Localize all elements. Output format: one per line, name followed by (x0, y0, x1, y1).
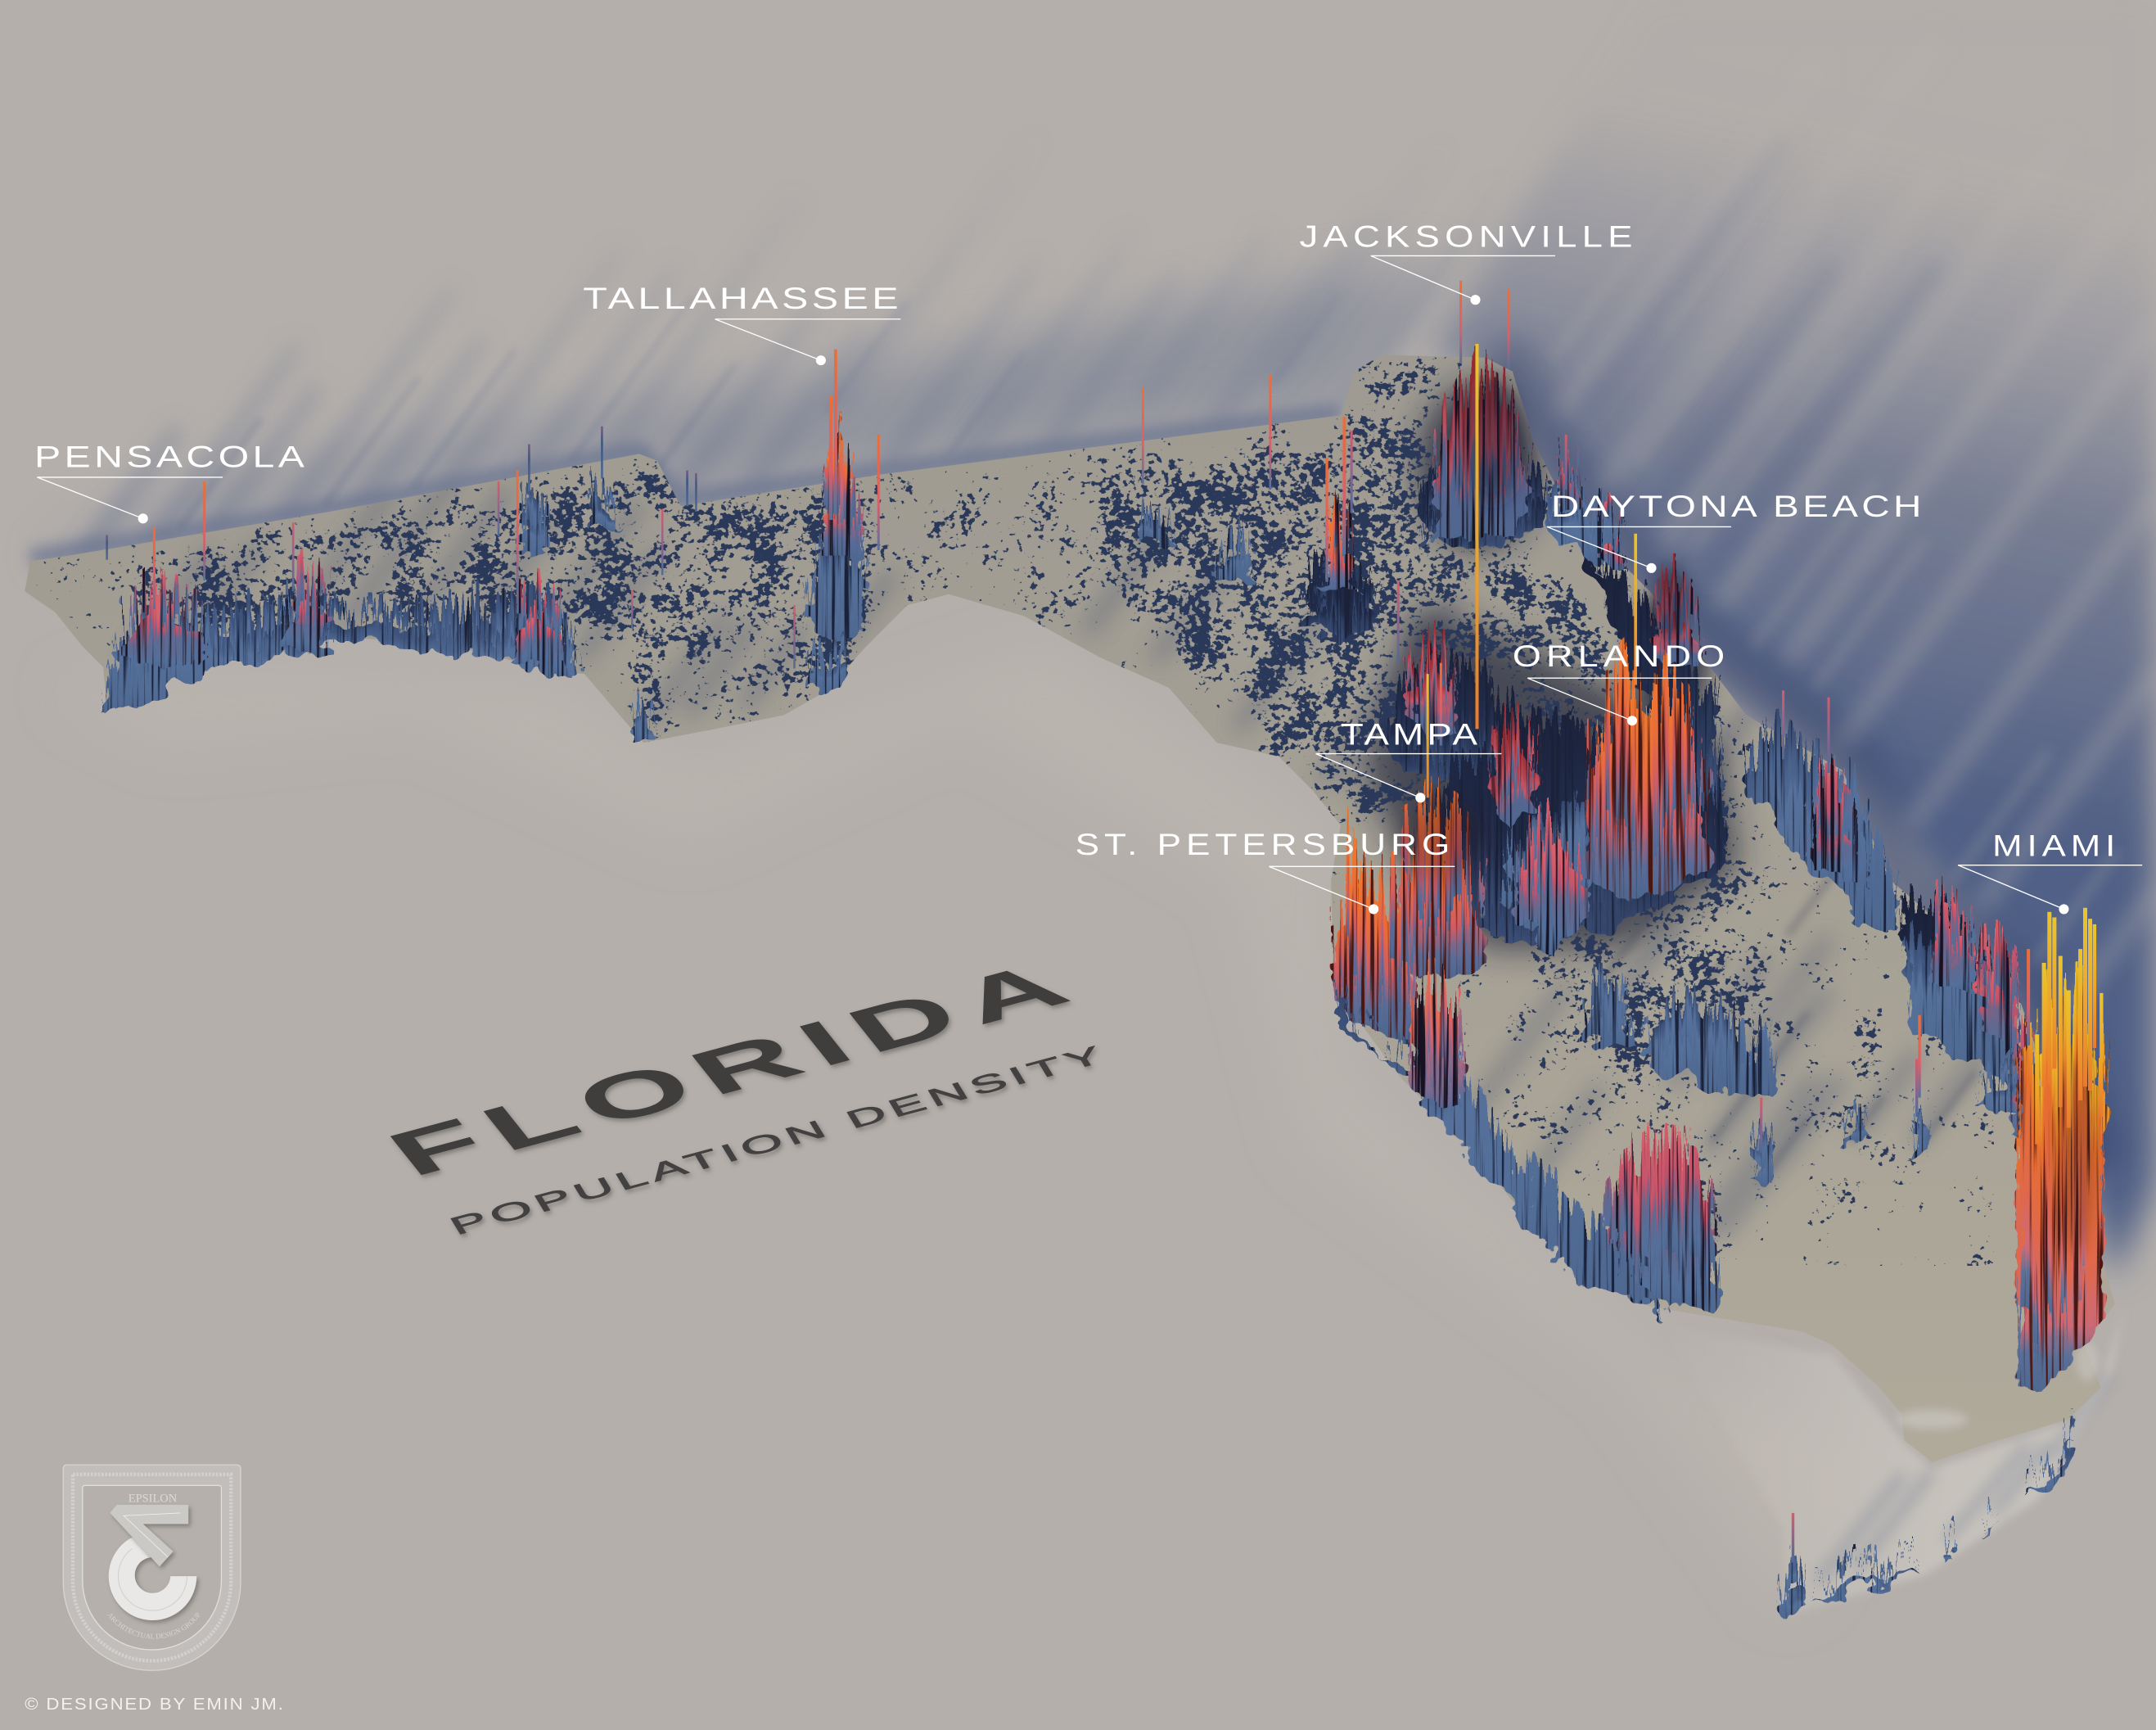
bars: Pensacola base (103, 627, 206, 712)
bars: Chipley (512, 516, 548, 550)
shadow: keys cast streaks (1818, 1375, 2111, 1582)
bars: Gainesville navy (1306, 571, 1375, 639)
bars: Sebring (1581, 991, 1636, 1046)
bars: Gainesville peak (1320, 522, 1359, 594)
bars: Tampa (1400, 842, 1488, 983)
bars: Daytona peak (1650, 605, 1703, 668)
EPSILON wordmark: EPSILON (129, 1492, 178, 1505)
scattered low-density block clusters (97, 358, 1952, 1210)
bars: Treasure Coast navy (1897, 915, 2010, 1059)
bars: Pensacola peak (127, 603, 206, 677)
label: Miami: MIAMI (1992, 829, 2120, 863)
logo: Epsilon shield (62, 1464, 241, 1671)
label: Miami (1958, 829, 2142, 914)
bars: Lakeland base (1505, 825, 1595, 928)
bars: Madison area (1134, 520, 1169, 544)
bars: Jupiter (1973, 973, 2018, 1062)
label: Pensacola: PENSACOLA (34, 440, 308, 473)
bars: St. Petersburg (1331, 888, 1416, 1038)
bars: Palm Beach (2012, 1066, 2042, 1145)
bars: central Florida navy field (1430, 716, 1730, 952)
credit line: © DESIGNED BY EMIN JM. (25, 1696, 285, 1714)
bars: Inland Tampa peak (1488, 754, 1537, 828)
label: Tampa (1316, 718, 1501, 802)
bars: Key Largo (2035, 1451, 2077, 1499)
bars: Lakeland peak (1513, 850, 1592, 955)
bars: Jacksonville crown (1432, 407, 1529, 542)
group name text: ARCHITECTUAL DESIGN GROUP (107, 1613, 200, 1639)
map: Florida land slab (25, 355, 2115, 1462)
bars: St. Augustine coast wall (1547, 495, 1622, 578)
label: Daytona Beach (1547, 490, 1925, 573)
darkened cores inside metro clusters (1402, 377, 2095, 1252)
shallow water glow along the coast (55, 647, 1897, 1610)
bars: panhandle gulf wall (101, 619, 578, 712)
bars: Key West (1788, 1582, 1806, 1612)
label: Jacksonville: JACKSONVILLE (1299, 220, 1638, 254)
bars: St. Marks strip (811, 663, 841, 694)
bars: Panama City (506, 619, 572, 671)
bars: Ocala peak (1405, 671, 1460, 743)
bars: Lower Keys (1815, 1576, 1928, 1602)
label: St. Petersburg: ST. PETERSBURG (1076, 828, 1455, 861)
bars: Okeechobee (1643, 1018, 1776, 1089)
label: Daytona Beach: DAYTONA BEACH (1551, 490, 1925, 523)
bars: Fort Myers and Naples (1602, 1169, 1719, 1313)
label: Tallahassee: TALLAHASSEE (583, 282, 902, 315)
title: Florida: FLORIDA (372, 946, 1097, 1190)
low-rise blue bars across the state (101, 495, 2077, 1612)
bars: Lake City area (1210, 548, 1258, 578)
bars: front west coast wall (1331, 997, 1661, 1313)
bars: Orlando (1581, 712, 1716, 901)
bars: Treasure Coast wall (1905, 949, 2021, 1073)
bars: Palm Bay (1808, 805, 1867, 886)
high-rise metro bars (1331, 712, 2104, 1389)
land shadows cast by the bars (131, 385, 1990, 1279)
label: Orlando: ORLANDO (1513, 639, 1730, 673)
bars: Tallahassee base (805, 553, 869, 644)
group name on arc (101, 1602, 208, 1638)
bars: Marathon (1936, 1546, 1958, 1554)
bars: Ocala navy (1382, 674, 1499, 787)
bars: Daytona navy band (1581, 553, 1725, 809)
bars: Palm Beach inland (1980, 1080, 2021, 1121)
label: Orlando (1513, 639, 1730, 725)
bars: Lake Worth inland (1905, 1117, 1932, 1149)
tall individual spikes (106, 281, 2103, 1562)
label: Pensacola (34, 440, 308, 523)
shield outer frame (63, 1465, 241, 1670)
bars: LaBelle (1746, 1145, 1776, 1183)
bars: Jacksonville navy ring (1416, 468, 1551, 548)
lower epsilon ring (109, 1535, 196, 1620)
bars: Clewiston (1843, 1125, 1870, 1141)
shadow: long cast shadow north of the panhandle (28, 133, 1499, 561)
bars: Miami (2016, 1034, 2104, 1389)
shield inner panel (83, 1485, 221, 1650)
shadow: heavy cast shadow east of the peninsula (1430, 0, 2156, 1279)
compass line detail (124, 1513, 180, 1557)
subtitle: Population Density: POPULATION DENSITY (444, 1039, 1113, 1240)
pale marsh patches on the south tip (1897, 1343, 2098, 1429)
mid-rise pink bars (127, 407, 2042, 1313)
upper epsilon bar (110, 1505, 188, 1566)
bars: St. Augustine (1557, 479, 1584, 506)
shield meander band (73, 1475, 231, 1661)
label: Tallahassee (583, 282, 902, 365)
bars: Islamorada (1980, 1520, 2000, 1534)
label: Tampa: TAMPA (1341, 718, 1481, 752)
bars: Tallahassee peak (819, 471, 864, 557)
bars: Port St. Lucie (1932, 924, 1980, 996)
bars: Palm Coast (1595, 548, 1620, 572)
shallows between mainland and keys (1664, 1307, 2124, 1615)
label: St. Petersburg (1076, 828, 1455, 914)
label: Jacksonville (1299, 220, 1638, 305)
bars: Space Coast wall (1746, 743, 1905, 935)
bars: Fort Walton (282, 594, 330, 652)
bars: Sarasota in front of Tampa (1405, 1001, 1471, 1109)
bars: Marianna (589, 506, 619, 530)
bars: Apalachicola (633, 716, 663, 743)
dense navy mid-field bars (1306, 468, 2010, 1059)
